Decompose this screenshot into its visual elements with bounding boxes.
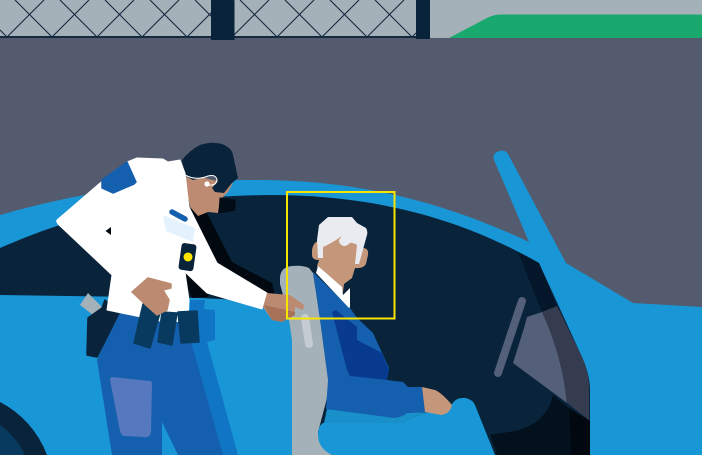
car wheel [0,402,47,455]
car door [0,295,300,455]
shirt fold [106,227,111,235]
seat back [280,266,332,455]
driver seat base [382,449,456,455]
officer trousers [97,310,223,455]
officer hand on belt [132,278,171,315]
car window [0,195,590,455]
officer shadow on window [180,208,275,298]
background: fence and sky band [0,0,702,40]
shoulder patch [102,162,136,193]
holstered gun grip [80,293,102,315]
officer earpiece [185,175,217,187]
driver suit jacket [313,272,425,418]
driver [312,217,495,455]
car body [0,151,702,455]
belt pouches [134,304,199,348]
officer [57,143,304,455]
holster [87,300,119,357]
seat highlight [305,318,309,344]
jacket shadow [332,310,389,380]
background: green hedge [449,14,702,38]
body camera [178,243,197,271]
driver head [312,228,368,292]
officer neck and face [183,172,233,216]
windshield wiper [498,301,522,373]
driver shirt collar [316,266,350,308]
officer hair [182,143,238,193]
officer white shirt [57,158,267,322]
windshield shading [490,252,590,455]
shirt pocket [163,215,195,242]
driver hair [317,217,367,264]
officer pointing hand [263,293,304,322]
driver legs [318,398,495,455]
yellow face detection frame [287,192,394,318]
officer trousers far leg [190,300,238,455]
name badge [172,212,185,219]
officer open mouth [219,198,235,213]
trouser pocket [110,377,152,437]
driver thigh shadow [324,409,430,423]
driver hand [422,387,452,415]
